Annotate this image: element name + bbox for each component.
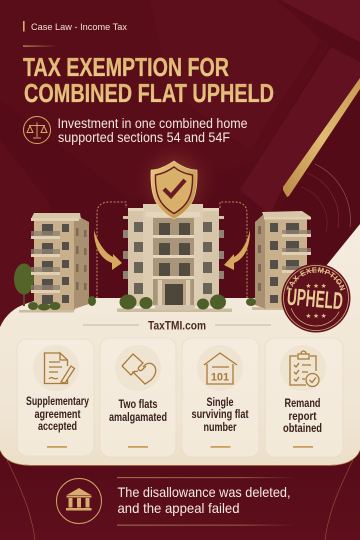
title: TAX EXEMPTION FOR (23, 52, 229, 82)
verdict text: and the appeal failed (118, 500, 240, 516)
icon: joined puzzle pieces (122, 354, 156, 384)
stamp: tax exemption upheld: TAX EXEMPTION (286, 267, 346, 291)
stamp: tax exemption upheld (282, 264, 350, 332)
corner arc left (7, 460, 35, 540)
icon: courthouse (56, 478, 102, 524)
stamp: tax exemption upheld: ★ ★ ★ (305, 282, 327, 290)
card: single surviving flat number: number (204, 422, 237, 434)
title (23, 52, 274, 108)
icon: checklist clipboard (290, 351, 319, 386)
dashed connector right (220, 202, 247, 298)
icon: signed document (44, 353, 74, 384)
tree (14, 264, 34, 306)
brand: TaxTMI.com: TaxTMI.com (148, 320, 206, 332)
arrow: left into center (94, 230, 122, 270)
card: two flats amalgamated: Two flats (118, 399, 158, 411)
cream content panel (0, 224, 360, 540)
title: COMBINED FLAT UPHELD (24, 78, 274, 108)
stamp: tax exemption upheld: ★ ★ ★ (305, 312, 327, 320)
subtitle: Investment in one combined home (58, 116, 248, 131)
card: single surviving flat number (182, 338, 259, 457)
card: two flats amalgamated: amalgamated (109, 412, 167, 424)
card: remand report obtained: report (288, 411, 317, 423)
ground shadow (19, 307, 302, 312)
verdict rule bottom (117, 524, 295, 526)
arrow: right into center (224, 230, 250, 270)
center building (123, 204, 224, 310)
dashed connector left (97, 202, 126, 298)
verdict rule top (117, 476, 295, 479)
verdict text (118, 484, 290, 516)
gold diagonal stripe (283, 78, 360, 197)
card: supplementary agreement accepted: Supplementary (26, 396, 89, 408)
card: remand report obtained (265, 338, 343, 457)
right building (255, 211, 311, 309)
icon: shield with check (151, 161, 197, 219)
subtitle (58, 116, 248, 145)
kicker: case law label: Case Law - Income Tax (31, 22, 127, 33)
left building (31, 213, 89, 310)
card: remand report obtained: Remand (284, 398, 320, 410)
card: two flats amalgamated (100, 338, 176, 457)
card: single surviving flat number: Single (206, 397, 234, 409)
icon: scales of justice (24, 116, 50, 144)
card: supplementary agreement accepted (17, 339, 94, 456)
bottom verdict band (0, 450, 360, 540)
band gold edge (0, 450, 360, 465)
subtitle: supported sections 54 and 54F (58, 130, 230, 145)
kicker divider (23, 46, 57, 47)
shrubs (28, 294, 256, 310)
card: supplementary agreement accepted: accepted (38, 421, 77, 433)
verdict text: The disallowance was deleted, (118, 484, 290, 500)
card: supplementary agreement accepted: agreement (34, 409, 81, 421)
card: single surviving flat number: surviving flat (192, 409, 249, 421)
icon: house with number 101: 101 (211, 372, 229, 384)
corner arc right (325, 460, 353, 540)
card: remand report obtained: obtained (283, 423, 322, 435)
